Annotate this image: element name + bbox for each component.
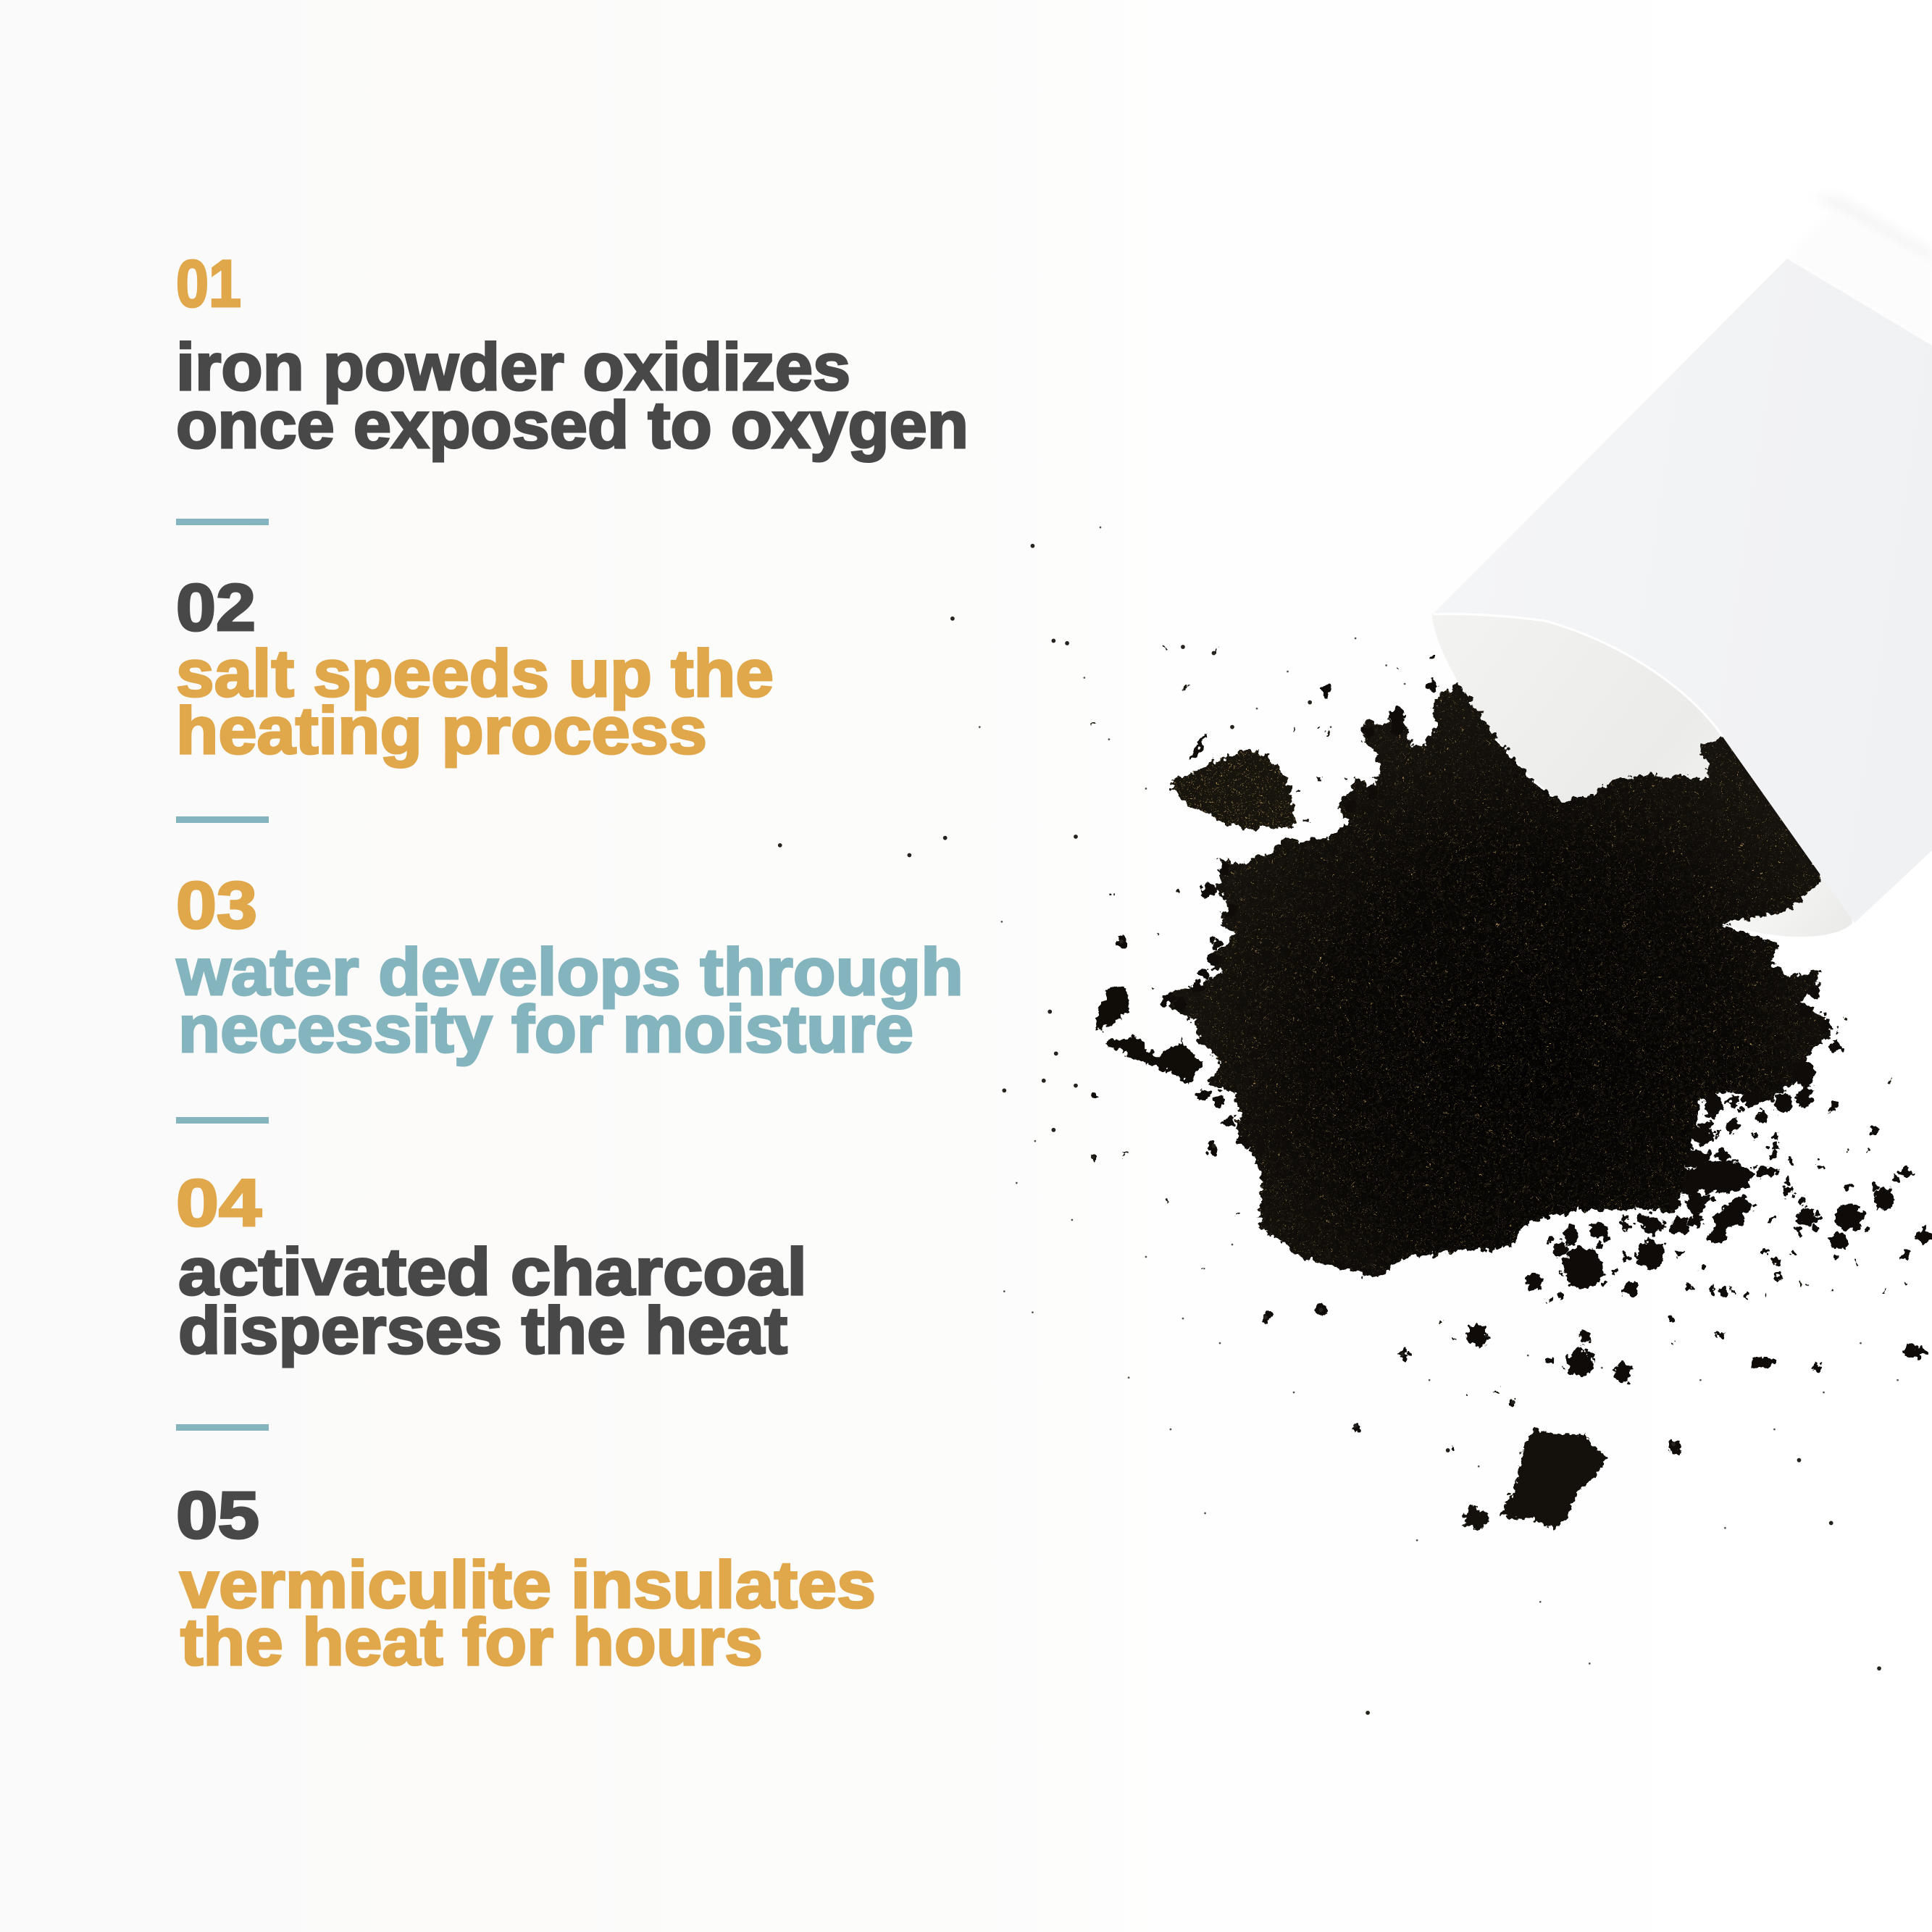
powder clumps (1090, 648, 1932, 1530)
item 01 (176, 247, 969, 462)
item 03 (176, 869, 963, 1066)
text: necessity for moisture: necessity for moisture (178, 992, 913, 1066)
text: water develops through: water develops through (176, 935, 963, 1009)
list of heating pack ingredients (176, 247, 969, 1679)
text: iron powder oxidizes: iron powder oxidizes (176, 330, 850, 404)
sachet shadow band (1811, 196, 1932, 269)
item 05 (176, 1479, 876, 1679)
powder pile (1159, 683, 1831, 1278)
number 04: 04 (176, 1166, 262, 1240)
item 02 (176, 571, 774, 768)
number 05: 05 (176, 1479, 259, 1552)
divider 4 (176, 1424, 269, 1431)
fine dust specks (780, 527, 1898, 1713)
text: heating process: heating process (176, 694, 707, 768)
edge crumbs (1572, 1098, 1782, 1236)
text: the heat for hours: the heat for hours (180, 1605, 763, 1679)
photo: spilled charcoal powder and paper sachet (780, 196, 1932, 1713)
text: activated charcoal: activated charcoal (178, 1235, 807, 1309)
text: salt speeds up the: salt speeds up the (176, 637, 774, 711)
item 04 (176, 1166, 807, 1368)
divider 1 (176, 519, 269, 525)
text: disperses the heat: disperses the heat (178, 1294, 787, 1368)
text: once exposed to oxygen: once exposed to oxygen (176, 388, 969, 462)
sachet inner paper (1431, 613, 1852, 937)
number 02: 02 (176, 571, 256, 645)
divider 2 (176, 816, 269, 823)
sachet outer flap (1433, 212, 1932, 938)
divider 3 (176, 1117, 269, 1124)
text: vermiculite insulates: vermiculite insulates (180, 1548, 876, 1622)
number 01: 01 (176, 247, 241, 321)
number 03: 03 (176, 869, 257, 942)
